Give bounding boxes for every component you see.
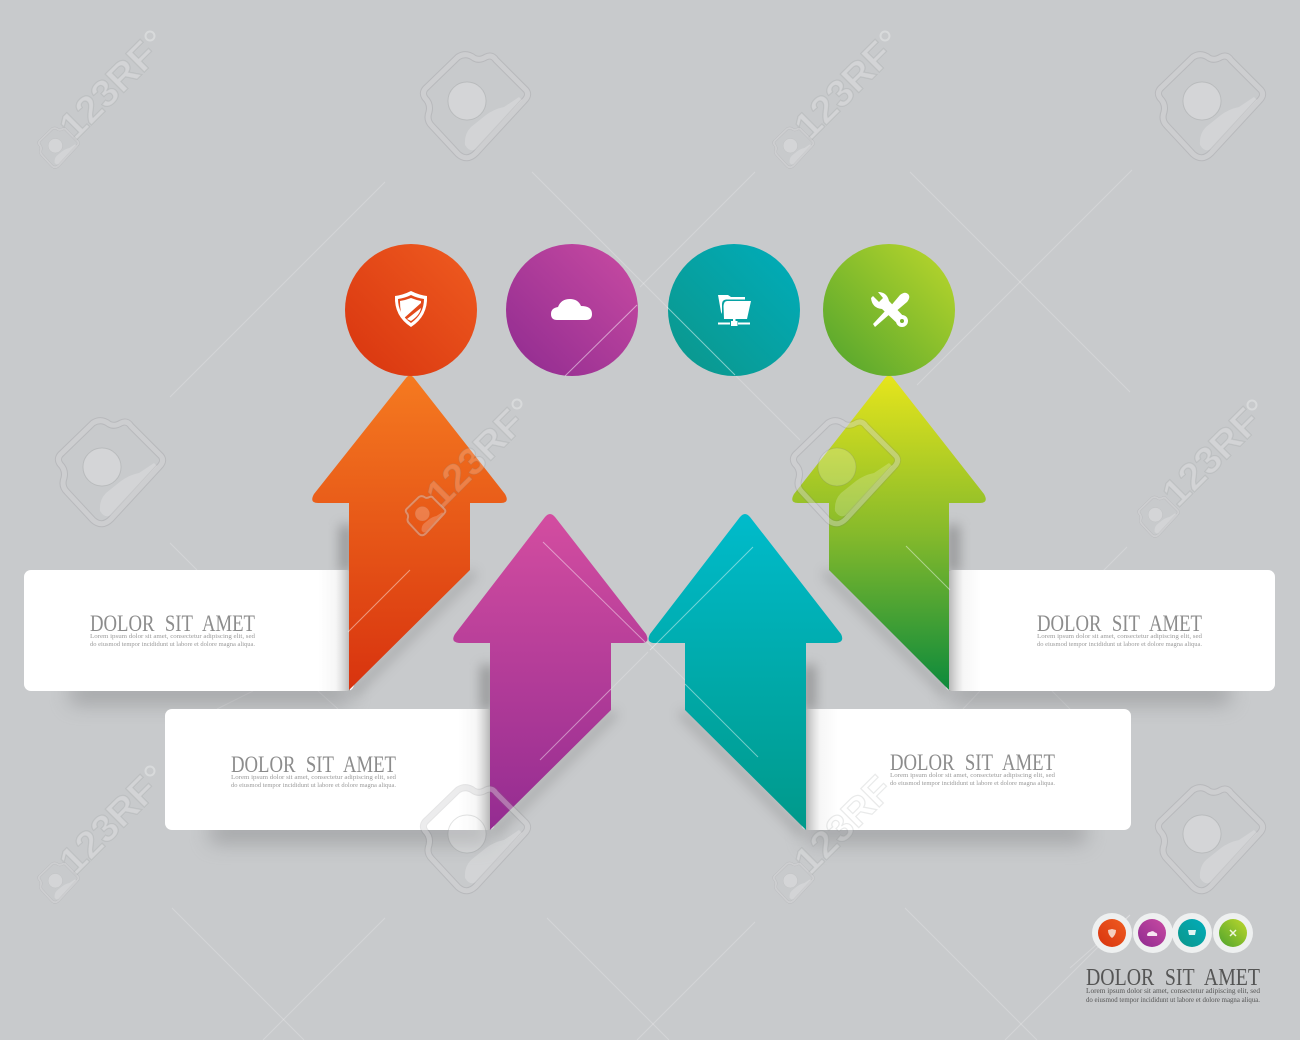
- card: bottom left: [165, 709, 495, 830]
- bottom shadows under cards: [70, 682, 1230, 843]
- legend text: Lorem ipsum dolor sit amet, consectetur adipiscing elit, sed: [1086, 987, 1261, 995]
- text: bottom right: [890, 772, 1056, 787]
- heading: bottom right: DOLOR SIT AMET: [890, 750, 1055, 775]
- card: top right: [945, 570, 1275, 691]
- heading: top left: DOLOR SIT AMET: [90, 611, 255, 636]
- circle: orange shield: [345, 244, 477, 376]
- watermark: egg logos: [58, 55, 1263, 891]
- text: bottom right: do eiusmod tempor incididunt ut labore et dolore magna aliqua.: [890, 780, 1055, 787]
- watermark: 123RF text: 123RF: [418, 401, 533, 516]
- icon: network folder: [718, 295, 751, 326]
- text: bottom right: Lorem ipsum dolor sit amet, consectetur adipiscing elit, sed: [890, 772, 1056, 779]
- icon: wrench and screwdriver: [871, 292, 909, 327]
- faint lines behind the graphics: [170, 170, 1132, 1040]
- arrow: teal: [649, 514, 842, 830]
- text: top right: [1037, 633, 1203, 648]
- arrow: green: [792, 376, 986, 690]
- circle: teal folder: [667, 244, 800, 376]
- circle: purple cloud: [506, 244, 638, 376]
- icon: cloud: [551, 299, 592, 320]
- line across teal circle: [667, 307, 735, 375]
- watermark: 123RF text: 123RF: [1154, 400, 1269, 515]
- watermark: 123RF text: 123RF: [51, 33, 166, 148]
- text: top left: do eiusmod tempor incididunt ut labore et dolore magna aliqua.: [90, 641, 255, 648]
- text: bottom left: Lorem ipsum dolor sit amet, consectetur adipiscing elit, sed: [231, 774, 397, 781]
- watermark: small logos: [39, 32, 1257, 902]
- watermark: 123RF text: 123RF: [786, 33, 901, 148]
- legend: small circles: [1092, 913, 1253, 953]
- legend heading: DOLOR SIT AMET: [1086, 965, 1260, 991]
- text: top left: [90, 633, 256, 648]
- card: top left: [24, 570, 354, 691]
- heading: bottom left: DOLOR SIT AMET: [231, 752, 396, 777]
- arrow: orange: [312, 376, 507, 690]
- text: top right: Lorem ipsum dolor sit amet, consectetur adipiscing elit, sed: [1037, 633, 1203, 640]
- icon: shield: [395, 291, 427, 327]
- legend text: [1086, 987, 1261, 1004]
- watermark: 123RF text: 123RF: [51, 768, 166, 883]
- line across purple circle: [565, 305, 637, 376]
- text: bottom left: [231, 774, 397, 789]
- thin lines across the arrows: [348, 542, 950, 760]
- arrow shadows on background: [340, 525, 959, 833]
- card: bottom right: [801, 709, 1131, 830]
- text: top right: do eiusmod tempor incididunt ut labore et dolore magna aliqua.: [1037, 641, 1202, 648]
- text: top left: Lorem ipsum dolor sit amet, consectetur adipiscing elit, sed: [90, 633, 256, 640]
- legend text: do eiusmod tempor incididunt ut labore et dolore magna aliqua.: [1086, 996, 1260, 1004]
- watermark: 123RF text: 123RF: [786, 768, 901, 883]
- heading: top right: DOLOR SIT AMET: [1037, 611, 1202, 636]
- arrow: purple: [453, 514, 647, 830]
- watermark: 123RF text: [51, 33, 1269, 883]
- circle: green tools: [823, 244, 955, 376]
- text: bottom left: do eiusmod tempor incididunt ut labore et dolore magna aliqua.: [231, 782, 396, 789]
